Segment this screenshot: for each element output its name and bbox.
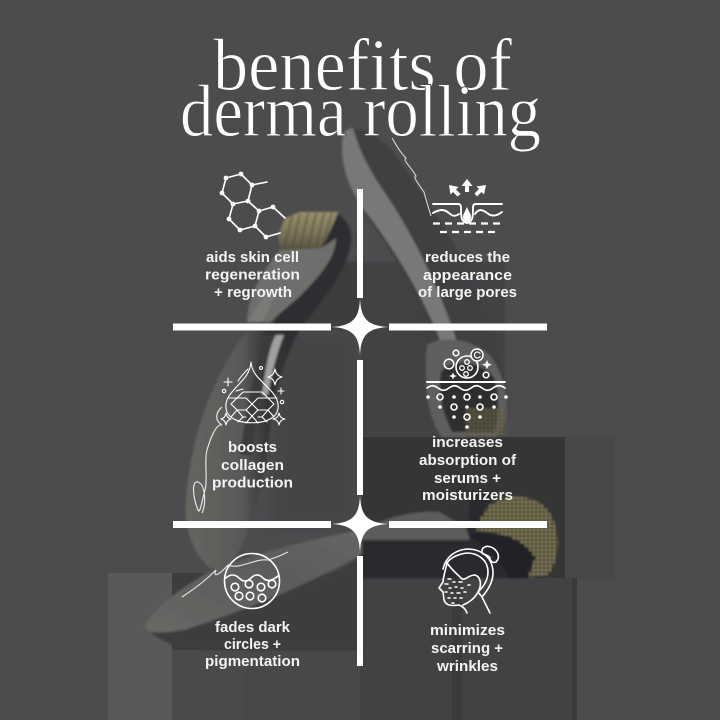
- panel: dark circles: [205, 554, 300, 670]
- panel: collagen: [212, 362, 293, 492]
- cross dividers: [173, 189, 547, 666]
- icon: head profile with scars: [439, 546, 498, 613]
- text: increases absorption of serums + moisturizers: serums +: [434, 470, 501, 487]
- text: boosts collagen production: production: [212, 474, 293, 492]
- panel: scarring and wrinkles: [430, 546, 505, 675]
- text: aids skin cell regeneration + regrowth: aids skin cell: [206, 249, 299, 266]
- sparkle lower: [331, 496, 389, 552]
- text: aids skin cell regeneration + regrowth: [205, 249, 300, 301]
- text: aids skin cell regeneration + regrowth: + regrowth: [214, 284, 292, 301]
- text: boosts collagen production: [212, 439, 293, 492]
- roller: left handle with head: [186, 212, 351, 571]
- icon: skin circle with pigment: [224, 554, 280, 608]
- text: boosts collagen production: boosts: [228, 439, 277, 456]
- roller: bottom handle with head: [145, 492, 558, 650]
- icon: collagen drop with sparkles: [221, 362, 285, 425]
- panel: large pores: [418, 179, 517, 301]
- text: minimizes scarring + wrinkles: wrinkles: [436, 658, 498, 675]
- script logo on left handle: [194, 407, 222, 513]
- photo: pedestals and derma rollers: [108, 128, 615, 720]
- text: minimizes scarring + wrinkles: [430, 622, 505, 675]
- roller: upper right handle: [342, 128, 508, 437]
- rear pedestal blocks: [108, 262, 615, 720]
- text: fades dark circles + pigmentation: pigmentation: [205, 653, 300, 670]
- divider bars: [173, 189, 547, 666]
- text: increases absorption of serums + moisturizers: increases: [432, 434, 503, 451]
- sparkle upper: [331, 299, 389, 355]
- text: reduces the appearance of large pores: appearance: [423, 267, 512, 284]
- icon: pore with arrows: [433, 179, 502, 232]
- title: derma rolling: [180, 71, 541, 153]
- text: fades dark circles + pigmentation: circles +: [224, 636, 281, 653]
- text: increases absorption of serums + moisturizers: absorption of: [419, 452, 517, 469]
- icon: molecule: [220, 172, 285, 239]
- text: boosts collagen production: collagen: [221, 457, 284, 474]
- panel: serum absorption: [419, 349, 517, 504]
- text: increases absorption of serums + moisturizers: moisturizers: [422, 487, 513, 504]
- text: fades dark circles + pigmentation: [205, 619, 300, 670]
- title: benefits of: [213, 25, 512, 107]
- script logo on bottom handle: [182, 552, 288, 597]
- text: minimizes scarring + wrinkles: minimizes: [430, 622, 505, 639]
- text: reduces the appearance of large pores: [418, 249, 517, 301]
- icon: serum molecules entering skin: [426, 349, 508, 429]
- text: minimizes scarring + wrinkles: scarring +: [431, 640, 503, 657]
- text: reduces the appearance of large pores: reduces the: [425, 249, 510, 266]
- title: [180, 25, 541, 153]
- text: reduces the appearance of large pores: of large pores: [418, 284, 517, 301]
- text: fades dark circles + pigmentation: fades dark: [215, 619, 291, 636]
- script logo on upper handle: [392, 138, 431, 216]
- text: aids skin cell regeneration + regrowth: regeneration: [205, 266, 300, 284]
- text: increases absorption of serums + moisturizers: [419, 434, 517, 504]
- panel: skin cell regeneration: [205, 172, 300, 301]
